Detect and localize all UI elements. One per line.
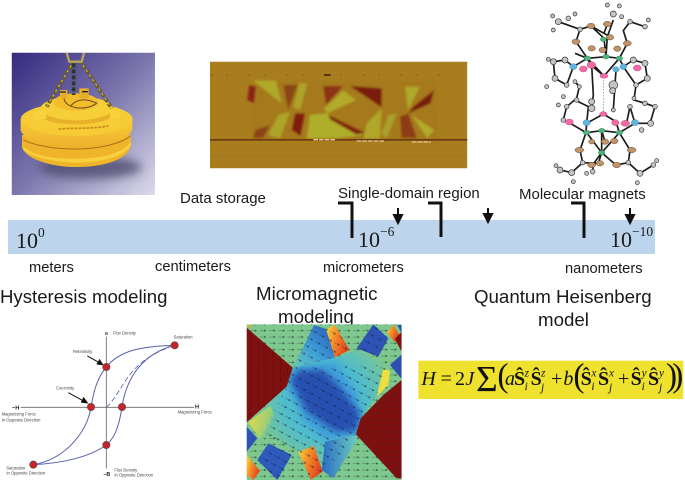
Heisenberg Hamiltonian equation: i: [591, 381, 594, 393]
unit label: centimeters: centimeters: [155, 259, 231, 275]
Heisenberg Hamiltonian equation: j: [607, 382, 612, 394]
Heisenberg Hamiltonian equation: x: [590, 368, 596, 380]
Heisenberg Hamiltonian equation: ): [666, 358, 677, 395]
hysteresis loop chart: Coercivity: [56, 385, 75, 390]
scale value 10^0: 10: [16, 228, 38, 253]
heading: micromagnetic modeling: Micromagnetic: [256, 283, 378, 304]
Heisenberg Hamiltonian equation: Ŝ: [531, 366, 542, 390]
Heisenberg Hamiltonian equation: i: [525, 381, 528, 393]
Heisenberg Hamiltonian equation: j: [657, 382, 662, 394]
Heisenberg Hamiltonian equation: +: [618, 368, 629, 390]
Heisenberg Hamiltonian equation: y: [658, 368, 665, 380]
Heisenberg Hamiltonian equation: Ŝ: [631, 366, 642, 390]
scale value 10^-6: −6: [380, 224, 395, 239]
lifting electromagnet photo: [12, 53, 155, 195]
Heisenberg Hamiltonian equation: a: [505, 368, 515, 390]
Heisenberg Hamiltonian equation: 2: [455, 368, 465, 390]
scale value 10^-10: −10: [632, 224, 653, 239]
Heisenberg Hamiltonian equation: (: [497, 358, 508, 395]
bracket marker: molecular boundary: [571, 203, 584, 238]
scale value 10^-10: 10: [610, 227, 632, 252]
hysteresis loop chart: Saturation: [174, 334, 193, 339]
hysteresis loop chart: H: [195, 405, 199, 411]
scale value 10^0: 0: [38, 225, 45, 240]
single-domain region label: Single-domain region: [338, 185, 480, 202]
Heisenberg Hamiltonian equation: Ŝ: [514, 366, 525, 390]
arrow: single-domain start: [394, 208, 402, 223]
Heisenberg Hamiltonian equation: i: [642, 381, 645, 393]
heading: quantum Heisenberg model: model: [538, 309, 589, 330]
unit label: nanometers: nanometers: [565, 261, 643, 277]
hysteresis loop chart: In Opposite Direction: [6, 470, 46, 475]
Heisenberg Hamiltonian equation: Ŝ: [648, 366, 659, 390]
magnetic domain microscopy image: [210, 62, 467, 168]
Heisenberg Hamiltonian equation: J: [465, 368, 475, 390]
scale value 10^-6: 10: [358, 227, 380, 252]
molecular magnets label: Molecular magnets: [519, 186, 646, 203]
hysteresis loop chart: Retentivity: [73, 349, 93, 354]
Heisenberg Hamiltonian equation: H: [420, 368, 437, 390]
hysteresis loop chart: Magnetizing Force: [178, 410, 213, 415]
bracket marker: single-domain boundary: [428, 203, 441, 237]
unit label: micrometers: micrometers: [323, 260, 404, 276]
heading: hysteresis modeling: Hysteresis modeling: [0, 286, 167, 307]
micromagnetic simulation map: [247, 324, 402, 480]
molecular magnet crystal structure: [545, 3, 659, 185]
Heisenberg Hamiltonian equation: Ŝ: [598, 366, 609, 390]
hysteresis loop chart: Flux Density: [113, 330, 137, 335]
Heisenberg Hamiltonian equation: =: [441, 368, 452, 390]
Heisenberg Hamiltonian equation: j: [539, 382, 544, 394]
Heisenberg Hamiltonian equation: ): [672, 358, 683, 395]
Heisenberg Hamiltonian equation: y: [641, 368, 648, 380]
Heisenberg Hamiltonian equation: z: [540, 368, 546, 380]
Heisenberg Hamiltonian equation: Ŝ: [581, 366, 592, 390]
heading: quantum Heisenberg model: Quantum Heisenberg: [474, 286, 652, 307]
length scale bar: [8, 220, 655, 254]
Heisenberg Hamiltonian equation: [418, 358, 683, 400]
hysteresis loop chart: In Opposite Direction: [114, 472, 154, 477]
Heisenberg Hamiltonian equation: x: [608, 368, 614, 380]
Heisenberg Hamiltonian equation: z: [524, 368, 530, 380]
hysteresis loop chart: Flux Density: [114, 468, 138, 473]
hysteresis loop chart: −B: [103, 472, 110, 478]
arrow: molecular magnets: [626, 208, 634, 223]
Heisenberg Hamiltonian equation: b: [563, 368, 573, 390]
bracket marker: micrometer boundary: [338, 203, 352, 238]
hysteresis loop chart: Magnetizing Force: [2, 411, 37, 416]
Heisenberg Hamiltonian equation: +: [551, 368, 562, 390]
data storage label: Data storage: [180, 190, 266, 207]
heading: micromagnetic modeling: modeling: [278, 306, 354, 327]
hysteresis loop chart: Saturation: [6, 466, 26, 471]
unit label: meters: meters: [29, 260, 74, 276]
Heisenberg Hamiltonian equation: Σ: [476, 359, 498, 400]
hysteresis loop chart: [2, 330, 213, 478]
Heisenberg Hamiltonian equation: (: [573, 358, 584, 395]
hysteresis loop chart: B: [105, 331, 108, 336]
hysteresis loop chart: −H: [12, 406, 19, 412]
arrow: single-domain end: [484, 208, 492, 222]
hysteresis loop chart: In Opposite Direction: [2, 417, 41, 422]
